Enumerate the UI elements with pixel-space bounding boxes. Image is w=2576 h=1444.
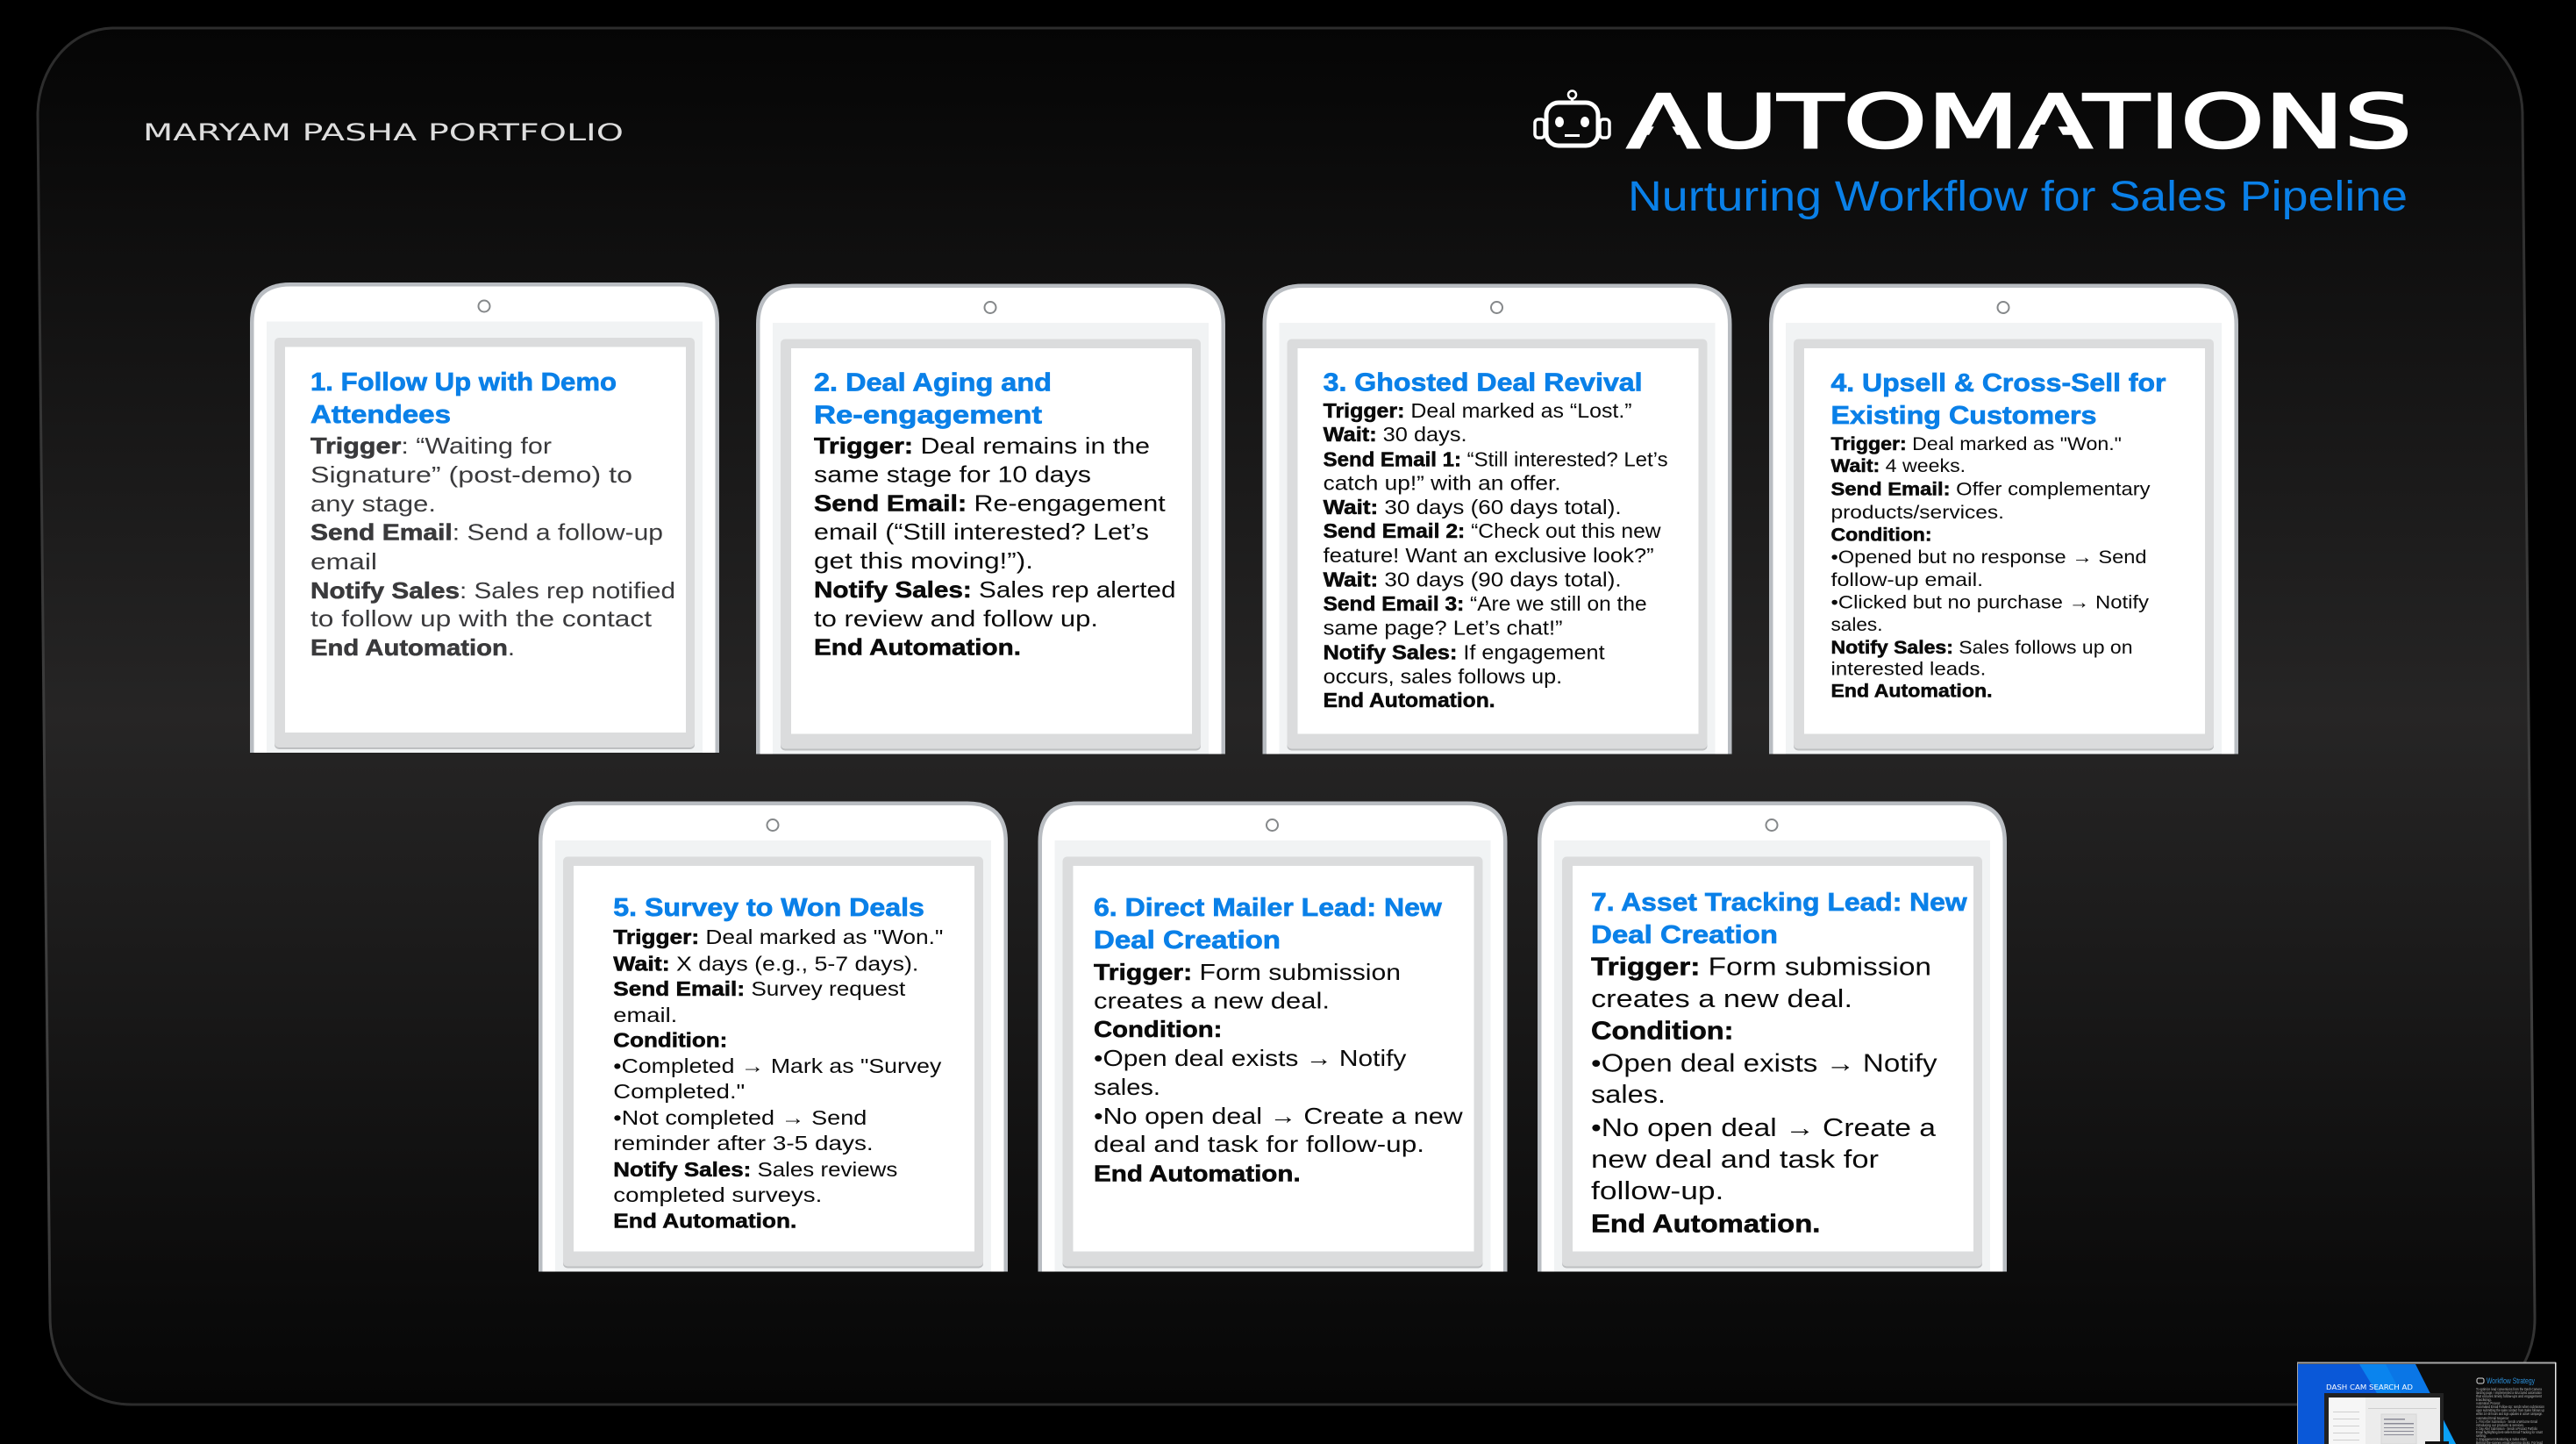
text block: card 6 steps: deal and task for follow-up. xyxy=(1094,1131,1424,1157)
text block: card 6 steps xyxy=(1094,959,1463,1187)
text block: card 4 steps: End Automation. xyxy=(1831,681,1993,702)
text block: card 5 steps xyxy=(613,926,943,1232)
panel: card 7 asset tracking lead xyxy=(1538,802,2007,1272)
heading: card 2 xyxy=(814,369,1052,429)
text block: card 5 steps: •Not completed → Send xyxy=(613,1106,867,1129)
text block: card 4 steps xyxy=(1831,433,2151,702)
main title: AUTOMATIONS xyxy=(1627,79,2412,165)
text block: card 4 steps: products/services. xyxy=(1831,502,2004,523)
text block: card 5 steps: •Completed → Mark as "Survey xyxy=(613,1054,942,1077)
text block: card 7 steps: End Automation. xyxy=(1591,1211,1820,1239)
text block: card 6 steps: Condition: xyxy=(1094,1016,1222,1042)
thumbnail: next slide preview: DASH CAM SEARCH AD xyxy=(2326,1383,2413,1391)
heading: card 3: 3. Ghosted Deal Revival xyxy=(1324,369,1643,397)
text block: card 5 steps: Condition: xyxy=(613,1028,727,1051)
thumbnail: next slide preview: selling. xyxy=(2476,1433,2487,1438)
text block: card 7 steps: Condition: xyxy=(1591,1018,1733,1046)
text block: card 7 steps: Trigger: Form submission xyxy=(1591,954,1931,982)
panel: card 4 upsell and cross-sell xyxy=(1769,284,2238,754)
heading: card 6: 6. Direct Mailer Lead: New xyxy=(1094,894,1442,922)
text block: card 3 steps: Wait: 30 days (90 days total). xyxy=(1324,568,1622,590)
text block: card 1 steps: Signature” (post-demo) to xyxy=(310,461,632,488)
text block: card 5 steps: Completed." xyxy=(613,1080,745,1103)
heading: card 7 xyxy=(1591,889,1967,949)
text block: card 7 steps: creates a new deal. xyxy=(1591,985,1852,1013)
text block: card 4 steps: follow-up email. xyxy=(1831,569,1983,590)
text block: card 5 steps: completed surveys. xyxy=(613,1183,822,1206)
heading: card 7: Deal Creation xyxy=(1591,921,1778,949)
thumbnail: next slide preview: upon submitting the sales contact from Sales follows up xyxy=(2476,1408,2544,1412)
heading: card 6 xyxy=(1094,894,1442,954)
text block: card 4 steps: interested leads. xyxy=(1831,659,1986,680)
text block: card 1 steps xyxy=(310,432,675,661)
heading: card 4: Existing Customers xyxy=(1831,402,2096,430)
text block: card 7 steps: sales. xyxy=(1591,1081,1666,1109)
text block: card 1 steps: Send Email : Send a follow-up xyxy=(310,519,663,546)
text block: card 5 steps: End Automation. xyxy=(613,1209,796,1232)
thumbnail: next slide preview: 2. Day After Submission - Sends a Product Portfolio xyxy=(2476,1426,2537,1431)
heading: card 1 xyxy=(310,368,617,429)
text block: card 5 steps: email. xyxy=(613,1004,677,1026)
text block: card 6 steps: Trigger: Form submission xyxy=(1094,959,1401,985)
text block: card 4 steps: Trigger: Deal marked as "Won." xyxy=(1831,433,2122,454)
text block: card 4 steps: •Opened but no response → Send xyxy=(1831,547,2147,568)
text block: card 2 steps: Send Email: Re-engagement xyxy=(814,490,1167,517)
text block: card 7 steps: •Open deal exists → Notify xyxy=(1591,1049,1937,1077)
text block: card 6 steps: •No open deal → Create a new xyxy=(1094,1103,1463,1129)
text block: card 5 steps: Trigger: Deal marked as "Won." xyxy=(613,926,943,948)
panel: card 2 deal aging and re-engagement xyxy=(756,284,1225,754)
thumbnail: next slide preview: introducing our products & services. xyxy=(2476,1423,2524,1427)
text block: card 1 steps: email xyxy=(310,548,377,575)
text block: card 1 steps: End Automation . xyxy=(310,634,515,661)
text block: card 2 steps: email (“Still interested? Let’s xyxy=(814,518,1149,545)
text block: card 5 steps: Send Email: Survey request xyxy=(613,977,906,1000)
text block: card 6 steps: sales. xyxy=(1094,1074,1160,1100)
text block: card 3 steps: Send Email 3: “Are we still on the xyxy=(1324,592,1647,615)
text block: card 2 steps: to review and follow up. xyxy=(814,605,1098,632)
text block: card 4 steps: Notify Sales: Sales follows up on xyxy=(1831,637,2133,658)
heading: card 6: Deal Creation xyxy=(1094,926,1281,954)
text block: card 1 steps: any stage. xyxy=(310,490,436,517)
text block: card 4 steps: Wait: 4 weeks. xyxy=(1831,455,1966,476)
panel: card 1 follow up with demo attendees xyxy=(250,282,719,753)
heading: card 1: Attendees xyxy=(310,401,451,429)
text block: card 3 steps: Send Email 1: “Still interested? Let’s xyxy=(1324,448,1668,471)
text block: card 2 steps: Notify Sales: Sales rep alerted xyxy=(814,576,1175,603)
heading: card 2: 2. Deal Aging and xyxy=(814,369,1052,397)
thumbnail: next slide preview: Automation Process: xyxy=(2476,1401,2501,1405)
text block: card 7 steps xyxy=(1591,954,1937,1239)
panel: card 5 survey to won deals xyxy=(539,802,1008,1272)
text block: card 1 steps: Trigger : “Waiting for xyxy=(310,432,552,459)
text block: card 6 steps: •Open deal exists → Notify xyxy=(1094,1045,1406,1071)
text block: card 4 steps: •Clicked but no purchase → Notify xyxy=(1831,591,2149,612)
heading: card 1: 1. Follow Up with Demo xyxy=(310,368,617,397)
heading: card 7: 7. Asset Tracking Lead: New xyxy=(1591,889,1967,917)
thumbnail: next slide preview: Automated Email Sequence: xyxy=(2476,1416,2509,1420)
thumbnail: next slide preview: landing page, I implemented a structured automation xyxy=(2476,1390,2542,1395)
thumbnail: next slide preview: that ensures timely follow-ups and engagement xyxy=(2476,1394,2543,1398)
text block: card 3 steps: catch up!” with an offer. xyxy=(1324,472,1561,495)
portfolio label: MARYAM PASHA PORTFOLIO xyxy=(143,119,624,147)
panel: card 3 ghosted deal revival xyxy=(1263,284,1731,754)
heading: card 2: Re-engagement xyxy=(814,401,1042,429)
text block: card 2 steps xyxy=(814,432,1175,660)
icon: robot xyxy=(1535,91,1609,146)
heading: card 4: 4. Upsell & Cross-Sell for xyxy=(1831,369,2166,397)
text block: card 3 steps: Wait: 30 days (60 days total). xyxy=(1324,496,1622,518)
text block: card 7 steps: follow-up. xyxy=(1591,1177,1723,1205)
text block: card 3 steps xyxy=(1324,399,1668,711)
text block: card 4 steps: sales. xyxy=(1831,614,1882,635)
text block: card 4 steps: Condition: xyxy=(1831,524,1931,545)
text block: card 6 steps: End Automation. xyxy=(1094,1161,1301,1187)
text block: card 4 steps: Send Email: Offer complementary xyxy=(1831,479,2151,500)
text block: card 3 steps: Notify Sales: If engagement xyxy=(1324,641,1605,664)
thumbnail: next slide preview: 3. Engagement Monitoring & Sales Alerts xyxy=(2476,1437,2528,1441)
text block: card 3 steps: feature! Want an exclusive look?” xyxy=(1324,544,1654,567)
text block: card 1 steps: Notify Sales : Sales rep notified xyxy=(310,577,675,604)
text block: card 3 steps: same page? Let’s chat!” xyxy=(1324,616,1563,639)
thumbnail: next slide preview xyxy=(2297,1362,2556,1444)
text block: card 7 steps: new deal and task for xyxy=(1591,1146,1880,1174)
panel: card 6 direct mailer lead xyxy=(1038,802,1507,1272)
heading: card 4 xyxy=(1831,369,2166,430)
text block: card 6 steps: creates a new deal. xyxy=(1094,988,1330,1014)
thumbnail: next slide preview: Email highlighting best-sellers Email Tracking for smart xyxy=(2476,1430,2544,1434)
text block: card 3 steps: Send Email 2: “Check out this new xyxy=(1324,519,1662,542)
thumbnail: next slide preview: Workflow Strategy xyxy=(2487,1376,2535,1385)
thumbnail: next slide preview: 1. First After Submission - Sends a Welcome Email xyxy=(2476,1419,2537,1424)
text block: card 2 steps: get this moving!”). xyxy=(814,547,1033,574)
thumbnail: next slide preview: tracking. xyxy=(2476,1398,2492,1402)
text block: card 5 steps: reminder after 3-5 days. xyxy=(613,1132,874,1154)
text block: card 3 steps: Trigger: Deal marked as “Lost.” xyxy=(1324,399,1632,422)
text block: card 3 steps: Wait: 30 days. xyxy=(1324,423,1467,446)
text block: card 2 steps: End Automation. xyxy=(814,633,1021,660)
text block: card 2 steps: same stage for 10 days xyxy=(814,461,1091,488)
text block: card 1 steps: to follow up with the contact xyxy=(310,605,653,632)
thumbnail: next slide preview: within 24-48 hours and logs updates in active campaign. xyxy=(2476,1412,2543,1416)
main title xyxy=(1627,79,2412,165)
subtitle: Nurturing Workflow for Sales Pipeline xyxy=(1628,174,2408,220)
text block: card 3 steps: End Automation. xyxy=(1324,689,1495,711)
text block: card 3 steps: occurs, sales follows up. xyxy=(1324,665,1562,688)
text block: card 7 steps: •No open deal → Create a xyxy=(1591,1114,1936,1142)
thumbnail: next slide preview: To optimize lead conversions from the Dash Camera xyxy=(2476,1387,2542,1391)
heading: card 5: 5. Survey to Won Deals xyxy=(613,894,924,922)
text block: card 5 steps: Wait: X days (e.g., 5-7 days). xyxy=(613,952,918,975)
text block: card 2 steps: Trigger: Deal remains in the xyxy=(814,432,1150,459)
thumbnail: next slide preview: Automated Email Follow-Up: sends when submission xyxy=(2476,1405,2544,1409)
text block: card 5 steps: Notify Sales: Sales reviews xyxy=(613,1158,897,1181)
